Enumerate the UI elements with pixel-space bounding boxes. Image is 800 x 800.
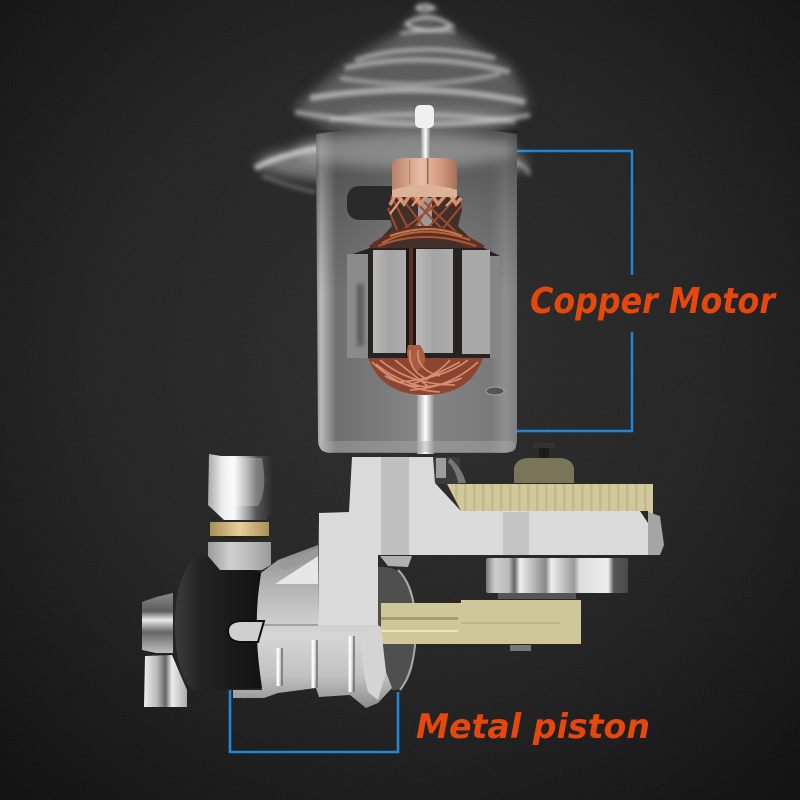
copper windings bottom — [368, 345, 483, 395]
aluminium bracket — [318, 457, 648, 625]
motor mount hardware — [434, 457, 466, 484]
swirl overlay on can — [295, 108, 515, 168]
piston connecting rod — [381, 600, 581, 651]
top gear hub — [514, 443, 574, 483]
can rivet — [486, 387, 504, 395]
upper shaft — [415, 105, 434, 160]
leader line: metal piston — [230, 690, 398, 752]
cap tab — [228, 621, 264, 642]
gearbox bracket assembly — [142, 443, 664, 708]
bracket highlight column — [381, 457, 409, 555]
transparent motor can — [316, 130, 517, 453]
yellow gear — [447, 484, 653, 524]
lower shaft — [417, 392, 434, 454]
can top transparency — [316, 130, 517, 453]
stator core — [347, 248, 500, 358]
ring rim — [398, 570, 416, 690]
bracket highlight right — [503, 512, 529, 555]
top fitting — [208, 454, 273, 570]
black end cap — [175, 556, 262, 690]
roller bearing — [486, 558, 628, 599]
right bracket end — [648, 512, 664, 555]
bracket screw — [380, 556, 412, 567]
can bottom highlight — [320, 441, 516, 452]
side slot — [347, 186, 407, 220]
label: metal piston: Metal piston — [416, 707, 650, 747]
label: copper motor: Copper Motor — [530, 281, 777, 322]
side fitting upper — [142, 593, 173, 653]
metal piston cylinder — [233, 545, 392, 708]
copper windings top — [370, 192, 482, 250]
side fitting lower — [144, 655, 187, 707]
leader line: copper motor — [505, 151, 632, 431]
spinning motion swirl — [255, 4, 530, 192]
cylinder rear ring — [378, 567, 416, 690]
copper motor — [295, 105, 517, 454]
commutator — [392, 158, 457, 197]
